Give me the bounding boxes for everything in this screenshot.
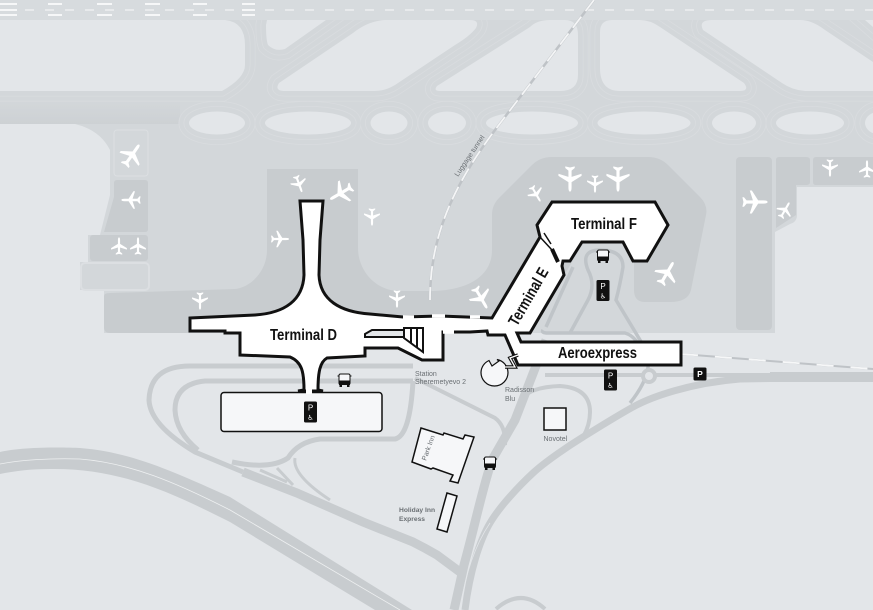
terminal access roads xyxy=(543,250,648,403)
pier gap to parking xyxy=(306,386,312,394)
roundabout xyxy=(643,370,655,382)
runway xyxy=(0,0,873,20)
roads xyxy=(149,340,873,610)
Holiday Inn Express hotel xyxy=(437,493,457,532)
Park Inn hotel xyxy=(412,428,474,483)
icon: bus, Park Inn xyxy=(483,457,497,470)
runway shoulder shading xyxy=(0,100,180,124)
highway divider at junction xyxy=(460,523,490,610)
Radisson Blu hotel xyxy=(481,355,518,386)
stands: east xyxy=(736,157,873,330)
title: Terminal D: Terminal D xyxy=(270,327,337,344)
icon: accessible parking, Terminal D xyxy=(304,402,317,422)
terminal complex outline xyxy=(190,201,681,391)
label: Park Inn: Park Inn xyxy=(421,435,437,462)
title: Terminal F: Terminal F xyxy=(571,216,637,233)
cavity and bars in Terminal D connector xyxy=(365,328,423,352)
label: Holiday Inn Express: Holiday Inn xyxy=(399,507,435,514)
icon: accessible parking, Aeroexpress: P xyxy=(608,372,613,380)
highway xyxy=(0,447,412,610)
icon: accessible parking, Terminal F xyxy=(596,280,610,301)
label: Radisson Blu: Radisson xyxy=(505,387,534,394)
label: Novotel: Novotel xyxy=(544,436,568,443)
icon: accessible parking, Terminal D: ♿ xyxy=(307,414,314,422)
icon: bus, Terminal D xyxy=(338,374,352,387)
taxiway rings xyxy=(0,20,873,134)
title: Aeroexpress: Aeroexpress xyxy=(558,345,637,362)
icon: accessible parking, Aeroexpress: ♿ xyxy=(607,382,614,390)
parking building, Terminal D xyxy=(221,392,382,432)
label: Station Sheremetyevo 2: Sheremetyevo 2 xyxy=(415,379,466,386)
airfield xyxy=(0,0,873,333)
connector gaps xyxy=(403,316,480,332)
title: Terminal E: Terminal E xyxy=(506,265,553,329)
Terminal E / F divider xyxy=(540,233,558,262)
icon: parking: P xyxy=(697,369,703,379)
inner area of Terminal F loop xyxy=(530,240,634,333)
icon: accessible parking, Terminal F: P xyxy=(600,282,606,291)
grass islands xyxy=(0,20,873,134)
icon: bus, Terminal F xyxy=(596,250,610,263)
luggage tunnel xyxy=(430,0,594,300)
aeroexpress rail xyxy=(681,354,873,369)
luggage tunnel label: Luggage tunnel xyxy=(454,134,487,178)
Novotel hotel xyxy=(544,408,566,430)
stands: west xyxy=(81,130,149,290)
icon: accessible parking, Terminal F: ♿ xyxy=(600,292,606,300)
icon: parking xyxy=(694,368,706,380)
label: Radisson Blu: Blu xyxy=(505,396,515,403)
icon: accessible parking, Terminal D: P xyxy=(308,404,313,412)
apron: terminals D, E, F xyxy=(104,157,706,333)
label: Holiday Inn Express: Express xyxy=(399,516,425,523)
airplanes xyxy=(111,138,873,314)
label: Station Sheremetyevo 2: Station xyxy=(415,371,437,378)
icon: accessible parking, Aeroexpress xyxy=(604,370,617,390)
